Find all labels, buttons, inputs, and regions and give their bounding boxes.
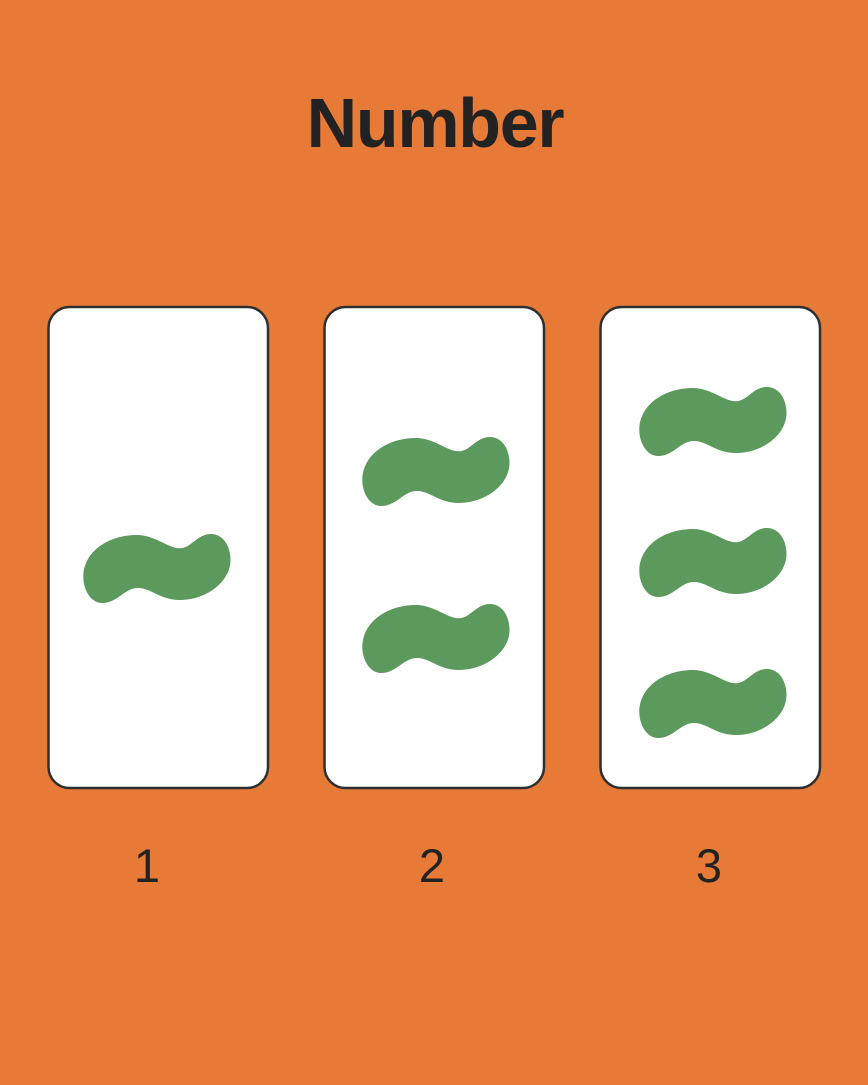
label: 2: 2: [419, 839, 445, 892]
icon: top squiggle: [639, 387, 786, 456]
icon: upper squiggle: [362, 437, 510, 506]
icon: bottom squiggle: [639, 669, 786, 738]
label: 1: 1: [134, 839, 160, 892]
panel: card 1: [48, 307, 268, 788]
label: 3: 3: [696, 839, 722, 892]
icon: squiggle: [83, 534, 230, 603]
panel: card 3: [600, 307, 820, 788]
panel: card 2: [324, 307, 544, 788]
icon: lower squiggle: [362, 604, 510, 673]
title: Number: [307, 84, 564, 162]
icon: middle squiggle: [639, 528, 786, 597]
